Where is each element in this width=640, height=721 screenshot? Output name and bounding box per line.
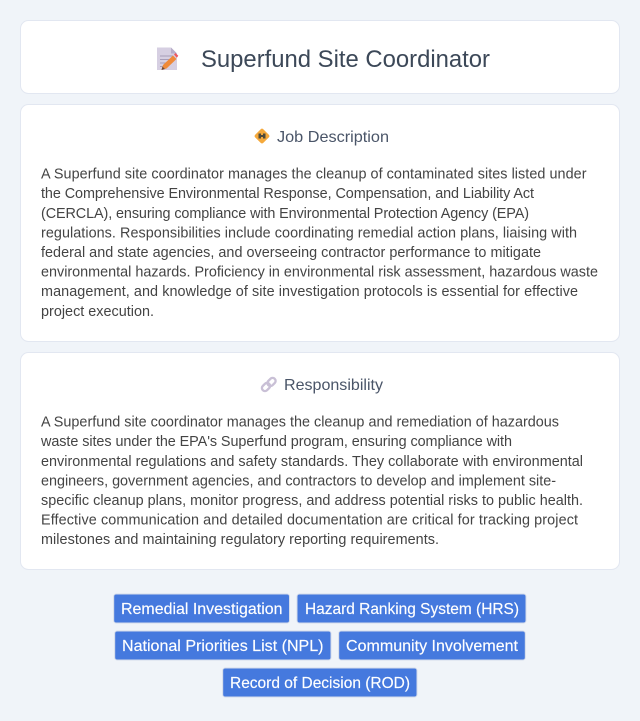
panel: responsibility: [20, 352, 620, 570]
chip: record of decision: [223, 668, 417, 697]
chip: remedial investigation: [114, 594, 290, 623]
text block: responsibility: engineers, government agencies, and contractors to develop and implement site-: [41, 473, 556, 489]
text block: responsibility: milestones and maintaining regulatory reporting requirements.: [41, 532, 439, 548]
tag chips: [114, 594, 526, 697]
text block: job description: federal and state agencies, and overseeing contractor performance to mitigate: [41, 245, 541, 261]
icon: document with pencil: [157, 48, 178, 70]
chip: hazard ranking system: [297, 594, 526, 623]
chip: national priorities list: National Priorities List (NPL): [122, 638, 324, 655]
text block: job description: [41, 167, 598, 320]
chip: community involvement: [339, 631, 525, 660]
heading: job description: Job Description: [277, 129, 389, 146]
chip: community involvement: Community Involvement: [346, 638, 519, 655]
heading: title text: Superfund Site Coordinator: [201, 46, 490, 73]
chip: record of decision: Record of Decision (ROD): [230, 675, 410, 692]
text block: responsibility: A Superfund site coordinator manages the cleanup and remediation of hazardous: [41, 415, 559, 431]
text block: responsibility: waste sites under the EPA's Superfund program, ensuring compliance with: [40, 434, 512, 450]
chip: national priorities list: [115, 631, 331, 660]
panel: job description: [20, 104, 620, 342]
text block: job description: A Superfund site coordinator manages the cleanup of contaminated sites listed under: [41, 167, 587, 183]
text block: job description: project execution.: [41, 304, 154, 320]
chip: remedial investigation: Remedial Investigation: [121, 601, 282, 618]
text block: job description: the Comprehensive Environmental Response, Compensation, and Liability Act: [41, 186, 534, 202]
chip: hazard ranking system: Hazard Ranking System (HRS): [305, 601, 519, 618]
icon: chain link: [261, 377, 277, 392]
text block: job description: management, and knowledge of site investigation protocols is essential for effective: [41, 284, 578, 300]
text block: job description: regulations. Responsibilities include coordinating remedial action plans, liaising with: [41, 225, 577, 241]
text block: job description: environmental hazards. Proficiency in environmental risk assessment, hazardous waste: [41, 265, 598, 281]
text block: job description: (CERCLA), ensuring compliance with Environmental Protection Agency (EPA): [41, 206, 529, 222]
text block: responsibility: specific cleanup plans, monitor progress, and address potential risks to public health.: [41, 493, 583, 509]
panel: title: [20, 20, 620, 94]
text block: responsibility: environmental regulations and safety standards. They collaborate with environmental: [41, 454, 583, 470]
icon: orange diamond sign: [254, 128, 270, 144]
text block: responsibility: Effective communication and detailed documentation are critical for tracking project: [41, 513, 578, 529]
heading: responsibility: Responsibility: [284, 377, 383, 394]
text block: responsibility: [40, 415, 583, 548]
